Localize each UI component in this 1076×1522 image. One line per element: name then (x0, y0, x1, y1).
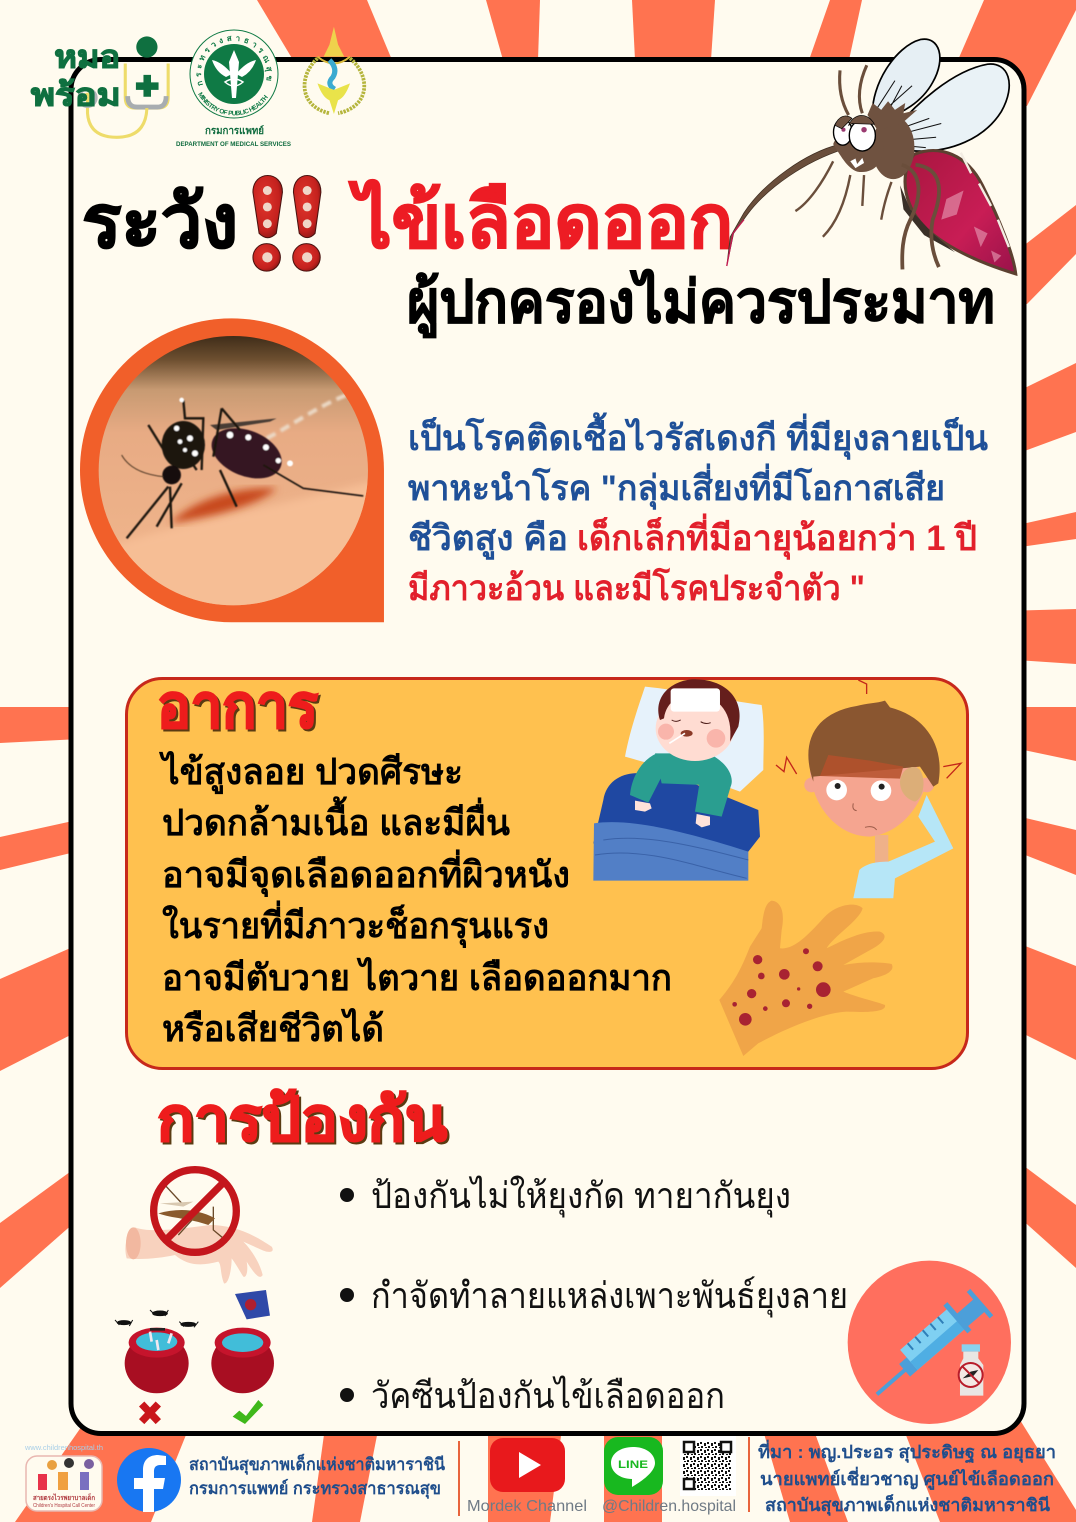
qr code (680, 1436, 736, 1496)
photo: mosquito on skin in orange teardrop frame (80, 318, 384, 622)
symptoms heading: อาการ (159, 675, 320, 742)
title word: beware: ระวัง (82, 180, 238, 263)
department of medical services caption: กรมการแพทย์ (205, 125, 264, 137)
bullet three: วัคซีนป้องกันไข้เลือดออก (371, 1375, 725, 1416)
logo: doctor ready: หมอ (54, 39, 120, 75)
icon: facebook (117, 1448, 181, 1512)
footer: children's health logo (24, 1443, 103, 1511)
main cream panel (71, 60, 1024, 1434)
footer: organisation names (189, 1452, 445, 1499)
illustration: feverish child in bed (593, 679, 764, 881)
icon: youtube (490, 1438, 565, 1492)
title (82, 175, 733, 271)
footer: organisation names: กรมการแพทย์ กระทรวงสาธารณสุข (189, 1478, 441, 1499)
panel: symptoms (126, 673, 968, 1068)
icon: line: LINE (618, 1459, 648, 1471)
footer: source credit (758, 1439, 1056, 1516)
icon: no mosquito on arm (125, 1170, 273, 1283)
illustration: cartoon mosquito (727, 39, 1016, 274)
footer: source credit: สถาบันสุขภาพเด็กแห่งชาติมหาราชินี (765, 1493, 1050, 1516)
description paragraph: พาหะนำโรค "กลุ่มเสี่ยงที่มีโอกาสเสีย (408, 463, 945, 510)
bullet two: กำจัดทำลายแหล่งเพาะพันธ์ยุงลาย (371, 1275, 848, 1318)
subtitle: ผู้ปกครองไม่ควรประมาท (407, 269, 995, 338)
description paragraph: เป็นโรคติดเชื้อไวรัสเดงกี ที่มียุงลายเป็น (408, 412, 988, 460)
department of medical services caption: DEPARTMENT OF MEDICAL SERVICES (176, 141, 292, 148)
symptoms list (158, 750, 672, 1049)
symptoms list: อาจมีจุดเลือดออกที่ผิวหนัง (162, 849, 570, 898)
bullet one: ป้องกันไม่ให้ยุงกัด ทายากันยุง (371, 1175, 791, 1218)
footer: source credit: นายแพทย์เชี่ยวชาญ ศูนย์ไข้เลือดออก (760, 1466, 1054, 1491)
symptoms heading: อาการ (157, 673, 318, 740)
logo: royal emblem (305, 27, 364, 114)
prevention heading: การป้องกัน (159, 1088, 449, 1155)
description paragraph: มีภาวะอ้วน และมีโรคประจำตัว " (408, 567, 865, 608)
icon: line (604, 1437, 663, 1495)
symptoms list: อาจมีตับวาย ไตวาย เลือดออกมาก (162, 956, 672, 998)
description paragraph: ชีวิตสูง คือ (408, 519, 568, 560)
symptoms list: ไข้สูงลอย ปวดศีรษะ (158, 750, 463, 795)
icon: treated water jar with larvicide sachet (211, 1290, 274, 1424)
logo: ministry of public health seal: MINISTRY OF PUBLIC HEALTH (198, 92, 268, 116)
icon: uncovered water jar with larvae (115, 1310, 198, 1422)
symptoms list: ในรายที่มีภาวะช็อกรุนแรง (162, 900, 549, 949)
illustration: child with headache (776, 680, 961, 898)
label: line account: @Children.hospital (602, 1498, 736, 1515)
prevention list (340, 1175, 848, 1416)
logo: doctor ready: พร้อม (31, 77, 121, 113)
footer: children's health logo: Children's Hospital Call Center (33, 1503, 95, 1509)
logo: ministry of public health seal (190, 30, 278, 118)
icon: vaccine syringe and vial (848, 1261, 1011, 1424)
description paragraph (408, 412, 988, 608)
footer: children's health logo: www.childrenhospital.th (24, 1443, 103, 1452)
footer: organisation names: สถาบันสุขภาพเด็กแห่งชาติมหาราชินี (189, 1452, 445, 1475)
logo: doctor ready (31, 36, 168, 137)
footer: children's health logo: สายตรงไวรพยาบาลเด็ก (33, 1493, 95, 1502)
description paragraph: เด็กเล็กที่มีอายุน้อยกว่า 1 ปี (577, 513, 977, 560)
illustration: hand with rash (719, 901, 892, 1056)
footer: source credit: ที่มา : พญ.ประอร สุประดิษฐ ณ อยุธยา (758, 1439, 1056, 1464)
prevention heading: การป้องกัน (157, 1086, 447, 1153)
department of medical services caption (176, 125, 292, 148)
icon: double exclamation marks (253, 175, 321, 271)
symptoms list: หรือเสียชีวิตได้ (162, 1007, 384, 1049)
logo: ministry of public health seal: กระทรวงสาธารณสุข (196, 36, 272, 86)
symptoms list: ปวดกล้ามเนื้อ และมีผื่น (162, 796, 510, 843)
label: youtube channel: Mordek Channel (467, 1498, 587, 1515)
title word: dengue fever: ไข้เลือดออก (348, 178, 733, 263)
